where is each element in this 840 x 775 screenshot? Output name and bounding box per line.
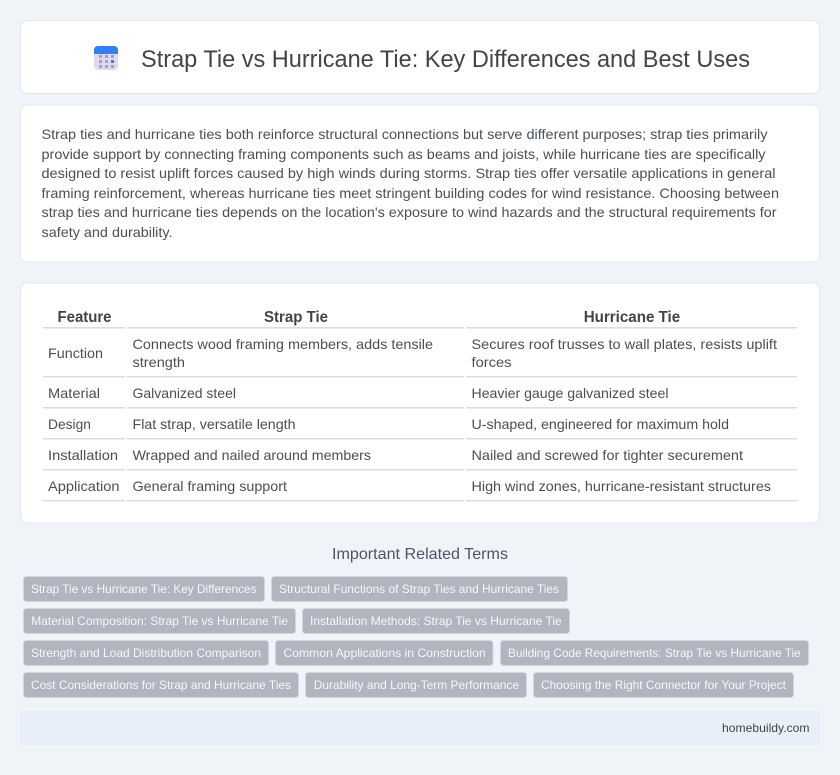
tag: durability: Durability and Long-Term Performance xyxy=(314,678,519,692)
tag: choosing connector xyxy=(534,672,794,698)
row: function: Connects wood framing members, adds tensile xyxy=(132,336,433,352)
row: function xyxy=(48,336,777,370)
tag: installation methods: Installation Methods: Strap Tie vs Hurricane Tie xyxy=(310,614,562,628)
heading: important related terms: Important Related Terms xyxy=(332,546,508,563)
related term tags xyxy=(24,576,808,698)
tag: common applications xyxy=(276,640,493,666)
row: design: U-shaped, engineered for maximum hold xyxy=(472,416,729,432)
row: function: forces xyxy=(472,354,512,370)
intro paragraph: Strap ties and hurricane ties both reinforce structural connections but serve different purposes; strap ties primarily xyxy=(42,126,768,142)
row: material xyxy=(48,385,668,401)
row: design: Design xyxy=(48,416,91,432)
tag: building code: Building Code Requirements: Strap Tie vs Hurricane Tie xyxy=(508,646,801,660)
row: installation: Wrapped and nailed around members xyxy=(132,447,371,463)
table header row: Feature xyxy=(58,309,112,326)
table header row: Strap Tie xyxy=(264,309,328,326)
intro paragraph: framing reinforcement, whereas hurricane ties meet stringent building codes for wind resistance. Choosing between xyxy=(42,185,779,201)
tag: durability xyxy=(306,672,526,698)
footer bar xyxy=(20,711,820,745)
row: application: Application xyxy=(48,478,120,494)
table row lines xyxy=(43,327,797,502)
row: material: Galvanized steel xyxy=(132,385,236,401)
row: material: Heavier gauge galvanized steel xyxy=(472,385,668,401)
table header row: Hurricane Tie xyxy=(584,309,680,326)
tag: cost considerations: Cost Considerations for Strap and Hurricane Ties xyxy=(31,678,291,692)
tag: cost considerations xyxy=(24,672,298,698)
footer source: homebuildy.com xyxy=(722,721,810,735)
tag: strength and load: Strength and Load Distribution Comparison xyxy=(31,646,261,660)
row: installation xyxy=(48,447,743,463)
tag: key differences xyxy=(24,576,264,602)
tag: structural functions xyxy=(272,576,568,602)
table header row xyxy=(58,309,680,326)
row: installation: Installation xyxy=(48,447,118,463)
tag: strength and load xyxy=(24,640,268,666)
header panel xyxy=(20,20,820,94)
row: application: High wind zones, hurricane-resistant structures xyxy=(472,478,771,494)
row: function: Secures roof trusses to wall plates, resists uplift xyxy=(472,336,777,352)
title: Strap Tie vs Hurricane Tie: Key Differences and Best Uses xyxy=(141,46,750,73)
tag: material composition: Material Composition: Strap Tie vs Hurricane Tie xyxy=(31,614,288,628)
tag: installation methods xyxy=(302,608,570,634)
intro paragraph: safety and durability. xyxy=(42,224,172,240)
row: function: strength xyxy=(132,354,185,370)
intro paragraph: strap ties and hurricane ties depends on the location's exposure to wind hazards and the structural requirements for xyxy=(42,204,777,220)
icon: calendar xyxy=(94,46,118,70)
panel: comparison table xyxy=(20,283,820,523)
row: application: General framing support xyxy=(132,478,287,494)
row: function: Function xyxy=(48,345,103,361)
tag: building code xyxy=(500,640,808,666)
tag: key differences: Strap Tie vs Hurricane Tie: Key Differences xyxy=(31,582,256,596)
tag: choosing connector: Choosing the Right Connector for Your Project xyxy=(541,678,787,692)
tag: structural functions: Structural Functions of Strap Ties and Hurricane Ties xyxy=(279,582,559,596)
intro paragraph xyxy=(42,126,779,240)
intro paragraph: provide support by connecting framing components such as beams and joists, while hurricane ties are specifically xyxy=(42,146,766,162)
intro paragraph: designed to resist uplift forces caused by high winds during storms. Strap ties offer versatile applications in general xyxy=(42,165,775,181)
panel: introduction xyxy=(20,105,820,262)
row: installation: Nailed and screwed for tighter securement xyxy=(472,447,743,463)
row: design xyxy=(48,416,729,432)
tag: material composition xyxy=(24,608,296,634)
row: application xyxy=(48,478,771,494)
tag: common applications: Common Applications in Construction xyxy=(284,646,486,660)
row: design: Flat strap, versatile length xyxy=(132,416,296,432)
row: material: Material xyxy=(48,385,100,401)
